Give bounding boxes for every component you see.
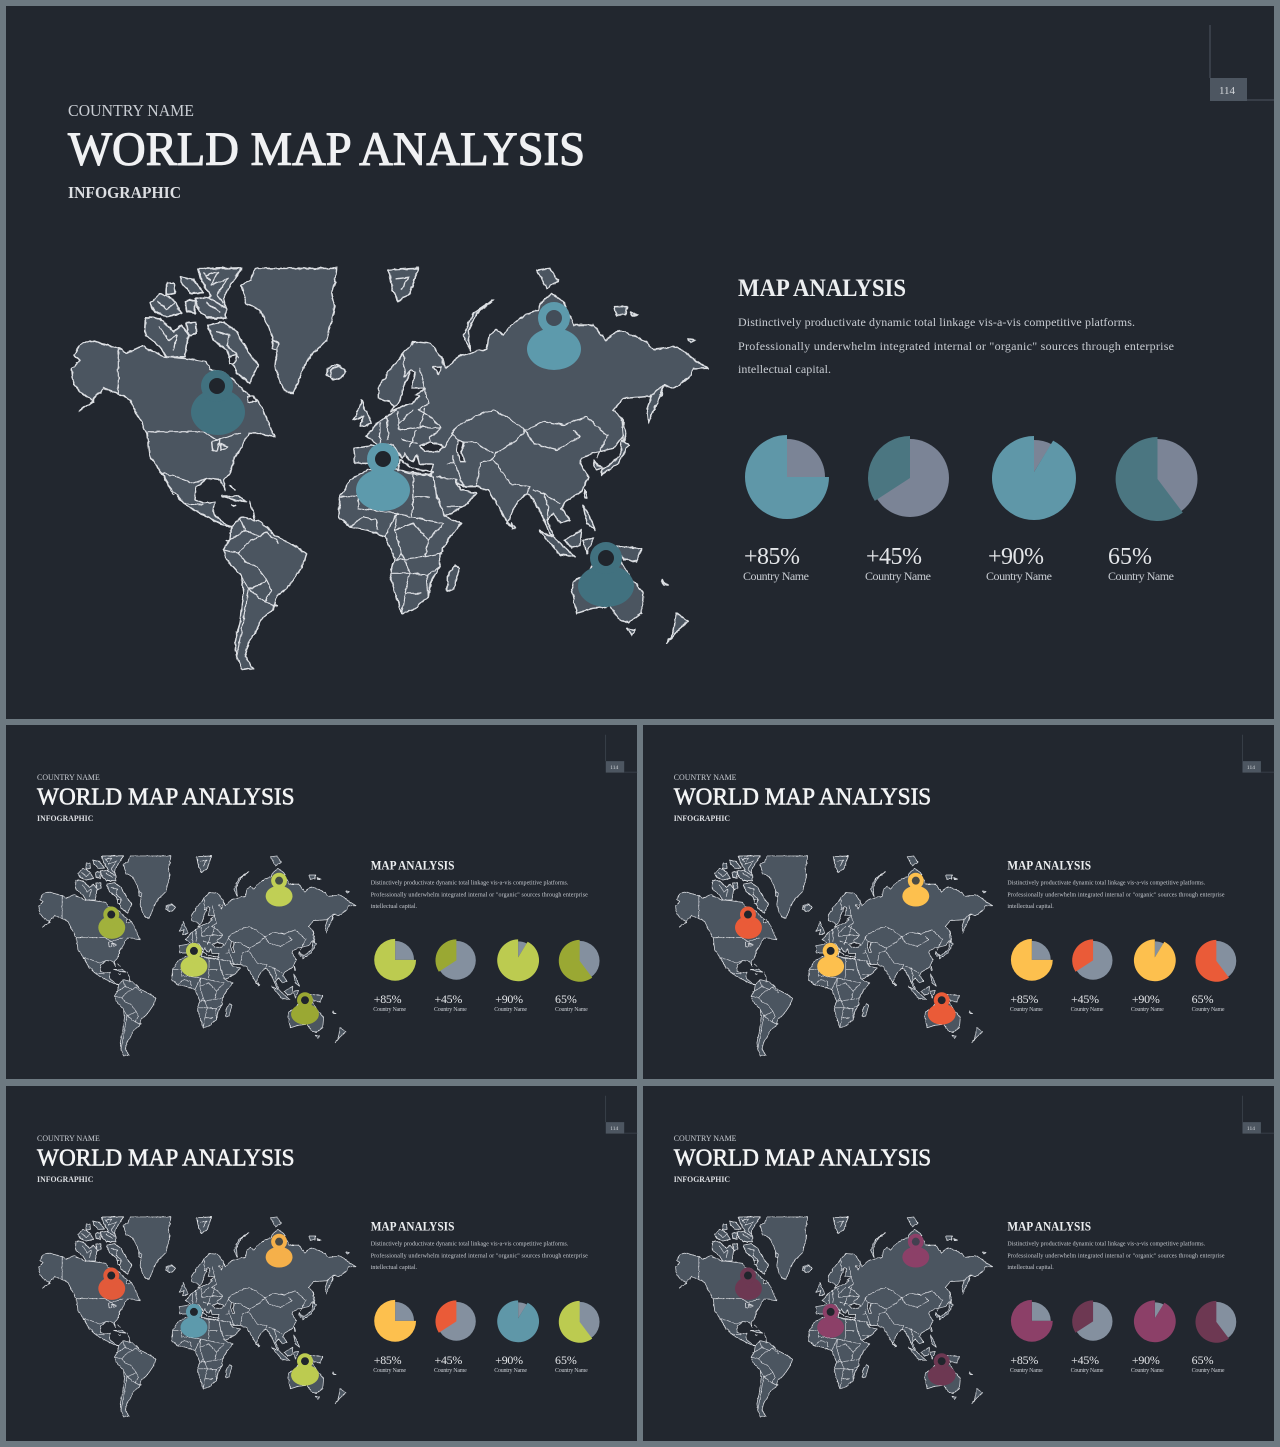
title block xyxy=(68,101,585,202)
pie labels: Country Name xyxy=(1108,569,1174,583)
pie chart: +45% xyxy=(868,436,949,517)
page number tab xyxy=(606,1096,638,1134)
map pin: Australia xyxy=(291,1353,319,1386)
title block: INFOGRAPHIC xyxy=(37,1174,93,1184)
world map xyxy=(39,1217,356,1417)
title block xyxy=(37,772,295,823)
pie labels: Country Name xyxy=(1010,1368,1043,1374)
map pin: North Africa xyxy=(180,943,207,977)
pie labels: Country Name xyxy=(373,1007,406,1013)
pie labels xyxy=(373,992,588,1013)
pie chart: +85% xyxy=(374,939,416,981)
heading and description: Distinctively productivate dynamic total linkage vis-a-vis competitive platforms. xyxy=(1007,1241,1206,1248)
page number tab xyxy=(1242,735,1274,773)
pie labels: +85% xyxy=(374,992,402,1006)
map pin: Russia xyxy=(902,873,929,907)
pie chart: +45% xyxy=(435,1300,476,1341)
pie labels: 65% xyxy=(555,992,577,1006)
pie chart: +90% xyxy=(497,1300,539,1342)
title block: INFOGRAPHIC xyxy=(68,183,181,202)
pie chart: 65% xyxy=(1116,437,1198,521)
pie labels: +85% xyxy=(374,1353,402,1367)
heading and description: MAP ANALYSIS xyxy=(371,1220,454,1234)
map pin: North Africa xyxy=(817,943,844,977)
pie labels: Country Name xyxy=(986,569,1052,583)
pie chart: +45% xyxy=(1072,939,1113,980)
map pin: Russia xyxy=(527,302,581,370)
title block: COUNTRY NAME xyxy=(674,1133,737,1143)
map pin: Australia xyxy=(928,992,956,1025)
heading and description: Professionally underwhelm integrated internal or "organic" sources through enterprise xyxy=(1007,892,1225,899)
heading and description: Professionally underwhelm integrated internal or "organic" sources through enterprise xyxy=(371,1253,588,1260)
pie labels: 65% xyxy=(1192,992,1214,1006)
pie labels: 65% xyxy=(1108,544,1152,570)
pie labels: +90% xyxy=(988,544,1044,570)
title block: COUNTRY NAME xyxy=(37,772,100,782)
panel: small slide green xyxy=(37,735,638,1056)
map pin: Russia xyxy=(266,1234,293,1268)
title block: COUNTRY NAME xyxy=(674,772,737,782)
heading and description xyxy=(738,275,1174,376)
title block: WORLD MAP ANALYSIS xyxy=(68,123,585,176)
pie chart: 65% xyxy=(1195,1301,1236,1343)
title block: WORLD MAP ANALYSIS xyxy=(37,1145,295,1171)
panel: small slide purple xyxy=(674,1096,1274,1417)
heading and description: Professionally underwhelm integrated internal or "organic" sources through enterprise xyxy=(1007,1253,1225,1260)
map pin: North Africa xyxy=(180,1304,207,1338)
pie labels: Country Name xyxy=(373,1368,406,1374)
page number tab: 114 xyxy=(1247,1126,1255,1132)
title block xyxy=(674,1133,931,1184)
heading and description: intellectual capital. xyxy=(371,1265,418,1271)
title block: WORLD MAP ANALYSIS xyxy=(674,784,931,810)
pie chart: +90% xyxy=(1134,1300,1176,1342)
pie chart: +85% xyxy=(745,435,829,519)
pie labels: Country Name xyxy=(494,1007,527,1013)
page number tab xyxy=(606,735,638,773)
map pin: Canada xyxy=(191,370,245,435)
heading and description: MAP ANALYSIS xyxy=(1007,1220,1091,1234)
pie labels xyxy=(743,544,1174,583)
map pin: Canada xyxy=(98,1268,125,1300)
pie chart: +45% xyxy=(1072,1300,1113,1341)
map pin: Canada xyxy=(98,907,125,939)
pie labels: +90% xyxy=(495,992,523,1006)
pie labels: 65% xyxy=(1192,1353,1214,1367)
pie labels: +45% xyxy=(1071,1353,1099,1367)
world map xyxy=(39,856,356,1056)
pie labels: +90% xyxy=(1132,1353,1160,1367)
pie labels xyxy=(1010,992,1225,1013)
title block: WORLD MAP ANALYSIS xyxy=(674,1145,931,1171)
heading and description: intellectual capital. xyxy=(1007,904,1054,910)
pie labels: Country Name xyxy=(434,1368,467,1374)
heading and description: Professionally underwhelm integrated internal or "organic" sources through enterprise xyxy=(738,339,1174,353)
pie chart: +85% xyxy=(1011,939,1053,981)
world map xyxy=(676,856,993,1056)
pie labels: Country Name xyxy=(1131,1007,1164,1013)
heading and description: MAP ANALYSIS xyxy=(1007,859,1091,873)
title block: COUNTRY NAME xyxy=(37,1133,100,1143)
heading and description: Distinctively productivate dynamic total linkage vis-a-vis competitive platforms. xyxy=(738,315,1135,329)
pie labels: Country Name xyxy=(1192,1007,1225,1013)
title block: INFOGRAPHIC xyxy=(674,813,730,823)
page number tab: 114 xyxy=(1219,85,1236,97)
page number tab xyxy=(1242,1096,1274,1134)
pie labels: Country Name xyxy=(1071,1368,1104,1374)
page number tab xyxy=(1210,25,1274,101)
page number tab: 114 xyxy=(1247,765,1255,771)
pie labels: Country Name xyxy=(743,569,809,583)
pie chart: +85% xyxy=(374,1300,416,1342)
page number tab: 114 xyxy=(610,1126,619,1132)
map pin: Australia xyxy=(291,992,319,1025)
map pin: Australia xyxy=(578,542,634,607)
map pin: North Africa xyxy=(356,443,410,511)
heading and description: intellectual capital. xyxy=(738,362,831,376)
pie labels: Country Name xyxy=(494,1368,527,1374)
pie chart: +45% xyxy=(435,939,476,980)
heading and description xyxy=(1007,1220,1225,1271)
pie labels xyxy=(1010,1353,1225,1374)
heading and description: Professionally underwhelm integrated internal or "organic" sources through enterprise xyxy=(371,892,588,899)
title block: INFOGRAPHIC xyxy=(37,813,93,823)
page number tab: 114 xyxy=(610,765,619,771)
pie labels: +45% xyxy=(434,1353,462,1367)
panel: small slide multicolour xyxy=(37,1096,638,1417)
pie labels: Country Name xyxy=(1010,1007,1043,1013)
pie chart: +90% xyxy=(497,939,539,981)
heading and description: Distinctively productivate dynamic total linkage vis-a-vis competitive platforms. xyxy=(371,1241,569,1248)
map pin: North Africa xyxy=(817,1304,844,1338)
world map xyxy=(72,268,708,670)
pie chart: 65% xyxy=(1195,940,1236,982)
title block: INFOGRAPHIC xyxy=(674,1174,730,1184)
pie labels: Country Name xyxy=(1071,1007,1104,1013)
heading and description: Distinctively productivate dynamic total linkage vis-a-vis competitive platforms. xyxy=(371,880,569,887)
heading and description xyxy=(371,1220,588,1271)
map pin: Russia xyxy=(266,873,293,907)
pie labels: Country Name xyxy=(555,1007,588,1013)
heading and description: MAP ANALYSIS xyxy=(371,859,454,873)
pie labels: Country Name xyxy=(1131,1368,1164,1374)
pie labels: +85% xyxy=(744,544,800,570)
pie labels: +45% xyxy=(1071,992,1099,1006)
panel: main slide teal xyxy=(68,25,1274,670)
pie labels: Country Name xyxy=(865,569,931,583)
map pin: Canada xyxy=(735,907,762,939)
pie labels: +45% xyxy=(434,992,462,1006)
pie labels: +85% xyxy=(1010,992,1038,1006)
pie labels xyxy=(373,1353,588,1374)
heading and description: MAP ANALYSIS xyxy=(738,275,906,302)
title block: WORLD MAP ANALYSIS xyxy=(37,784,295,810)
pie chart: +85% xyxy=(1011,1300,1053,1342)
title block xyxy=(37,1133,295,1184)
map pin: Australia xyxy=(928,1353,956,1386)
pie labels: Country Name xyxy=(555,1368,588,1374)
pie chart: 65% xyxy=(559,1301,600,1343)
heading and description: intellectual capital. xyxy=(371,904,418,910)
pie labels: +90% xyxy=(1132,992,1160,1006)
pie labels: +85% xyxy=(1010,1353,1038,1367)
pie chart: +90% xyxy=(992,436,1076,520)
heading and description xyxy=(371,859,588,910)
heading and description: intellectual capital. xyxy=(1007,1265,1054,1271)
map pin: Canada xyxy=(735,1268,762,1300)
pie labels: Country Name xyxy=(434,1007,467,1013)
title block: COUNTRY NAME xyxy=(68,101,194,120)
pie labels: 65% xyxy=(555,1353,577,1367)
pie labels: Country Name xyxy=(1192,1368,1225,1374)
title block xyxy=(674,772,931,823)
heading and description: Distinctively productivate dynamic total linkage vis-a-vis competitive platforms. xyxy=(1007,880,1206,887)
map pin: Russia xyxy=(902,1234,929,1268)
panel: small slide orange xyxy=(674,735,1274,1056)
world map xyxy=(676,1217,993,1417)
heading and description xyxy=(1007,859,1225,910)
pie labels: +45% xyxy=(866,544,922,570)
pie labels: +90% xyxy=(495,1353,523,1367)
pie chart: +90% xyxy=(1134,939,1176,981)
pie chart: 65% xyxy=(559,940,600,982)
